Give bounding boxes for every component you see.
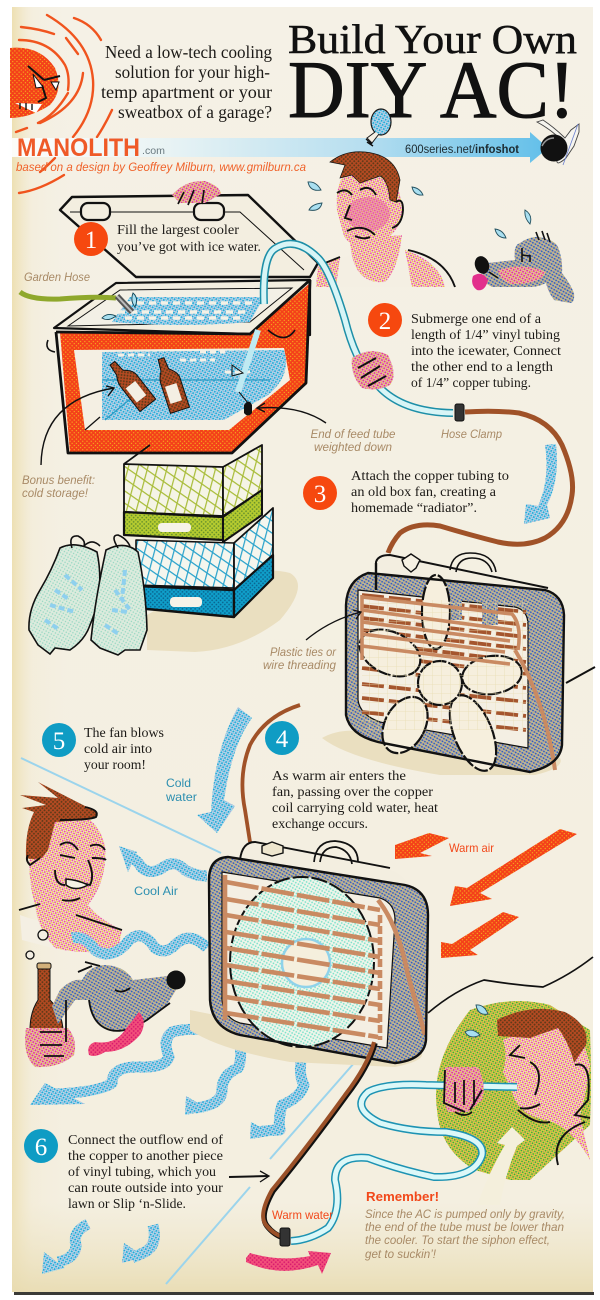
warm air arrows [395,829,577,958]
bag of ice 1 [29,536,100,654]
step 4 text: fan, passing over the copper [272,784,433,799]
clamp [280,1228,290,1246]
step 6 text: can route outside into your [68,1180,223,1195]
step 6 text: lawn or Slip ‘n-Slide. [68,1196,186,1211]
fan blades [352,575,524,777]
manolith logo: MANOLITH [17,134,140,162]
hand on bottle [25,1000,75,1067]
copper coil on fan [225,875,425,1040]
step 5 text: cold air into [84,741,152,756]
icon: bowling ball and pins [537,120,579,165]
power cord [428,957,593,1013]
step 2 text: length of 1/4” vinyl tubing [411,327,560,342]
remember note: the end of the tube must be lower than [365,1221,564,1234]
sweat drops [465,1005,488,1037]
step 4 badge: 4 [276,726,289,753]
angry sun [10,15,112,193]
box fan: step 4 [190,841,428,1067]
step 2 text: Submerge one end of a [411,311,541,326]
hand holding tube [352,351,394,389]
step 3 text: homemade “radiator”. [351,500,477,515]
step 2 text: into the icewater, Connect [411,343,561,358]
thought bubbles [26,930,48,959]
remember note: Remember! [366,1189,439,1204]
feed tube in cooler [232,330,258,416]
cold water label: Cold [166,776,191,790]
intro text: temp apartment or your [101,82,272,102]
remember note: Since the AC is pumped only by gravity, [365,1208,565,1221]
step 3 text: an old box fan, creating a [351,484,496,499]
hose clamp label: Hose Clamp [441,428,503,441]
step 5 badge [42,723,76,757]
room beam lines [21,758,355,1284]
title: DIY AC! [288,44,575,135]
blue flow arrow [524,444,557,524]
bonus benefit label: cold storage! [22,487,89,500]
plastic ties label: Plastic ties or [270,646,337,659]
remember note: get to suckin’! [365,1248,437,1261]
intro text: sweatbox of a garage? [118,102,272,122]
intro text: solution for your high- [115,62,270,82]
intro text [101,42,272,122]
bonus benefit label [22,474,95,500]
cooler lid [60,195,318,277]
outflow vinyl tube [291,1085,517,1241]
step 5 badge: 5 [53,728,65,755]
plastic ties label: wire threading [263,659,337,672]
step 6 badge [24,1129,58,1163]
step 4 badge [265,721,299,755]
feed tube label: weighted down [314,441,392,454]
cream upward arrow [477,1127,525,1205]
step 1 text: you’ve got with ice water. [117,239,261,254]
fist on tube [443,1067,484,1115]
bonus benefit label: Bonus benefit: [22,474,95,487]
bag of ice 2 [91,535,147,655]
stacked storage boxes [29,445,298,655]
step 6 text: the copper to another piece [68,1148,223,1163]
bottle [30,963,63,1030]
copper outflow tube [264,1043,375,1238]
warm water label: Warm water [272,1208,333,1222]
step 1 badge [74,222,108,256]
cool air squiggles [55,855,304,1262]
step 2 text: the other end to a length [411,359,553,374]
credit line: based on a design by Geoffrey Milburn, www.gmilburn.ca [16,160,306,174]
vinyl tubing [264,244,453,413]
plastic ties arrow [306,610,361,640]
happy man [19,782,125,960]
hand on lid [172,181,221,205]
plastic ties label [263,646,337,672]
garden hose label: Garden Hose [24,271,91,284]
step 3 text [351,468,509,515]
garden hose [20,292,137,320]
warm air label: Warm air [449,841,494,855]
intro text: Need a low-tech cooling [105,42,272,62]
step 3 badge: 3 [314,481,326,508]
icon: light bulb [366,109,391,146]
step 2 text [411,311,561,390]
box fan: step 3 [322,553,595,777]
cold water label [165,776,197,804]
step 2 badge: 2 [379,308,391,335]
step 4 text: As warm air enters the [272,768,406,783]
step 3 badge [303,476,337,510]
squiggle arrowheads [30,846,275,1274]
step 1 badge: 1 [85,227,97,254]
copper tube going to lower fan [242,705,300,842]
green backdrop [436,1001,591,1180]
dog looking up [472,210,574,303]
man sucking tube [436,1001,591,1205]
step 5 text: The fan blows [84,725,164,740]
sweating man [308,152,455,287]
step 3 text: Attach the copper tubing to [351,468,509,483]
arrow banner: .com [142,145,165,157]
sweat drops [308,182,423,210]
cold water arrow [197,707,252,833]
dog head [52,962,186,1056]
feed tube label [310,428,396,454]
arrow banner: 600series.net/infoshot [405,142,519,156]
step 4 text: exchange occurs. [272,816,368,831]
cooler [20,181,396,500]
cool air label: Cool Air [134,884,178,898]
arrow banner [6,132,548,163]
step 1 text [117,222,261,254]
step 6 text: of vinyl tubing, which you [68,1164,216,1179]
step 5 text [84,725,164,772]
magenta flow arrow [246,1251,331,1274]
copper coil on fan [362,595,555,770]
remember note: the cooler. To start the siphon effect, [365,1234,550,1247]
title: Build Your Own [288,16,577,62]
feed tube label: End of feed tube [310,428,396,441]
step 2 text: of 1/4” copper tubing. [411,375,531,390]
step 4 text: coil carrying cold water, heat [272,800,438,815]
step 6 text [68,1132,223,1211]
beer bottle 1 [106,356,156,411]
step 6 badge: 6 [35,1134,47,1161]
cooler body [47,280,310,453]
step 4 text [272,768,438,831]
step 6 text: Connect the outflow end of [68,1132,223,1147]
remember note [365,1189,565,1261]
step 5 text: your room! [84,757,146,772]
arrow to tube [229,1171,269,1182]
step 2 badge [368,303,402,337]
step 1 text: Fill the largest cooler [117,222,239,237]
beer bottle 2 [153,355,190,413]
arrows to cooler callouts [41,386,326,465]
dog with bottle [25,962,186,1067]
blue box [136,508,273,617]
cold water label: water [165,790,197,804]
green box [124,445,262,542]
hose clamp and copper tubing [388,404,573,553]
